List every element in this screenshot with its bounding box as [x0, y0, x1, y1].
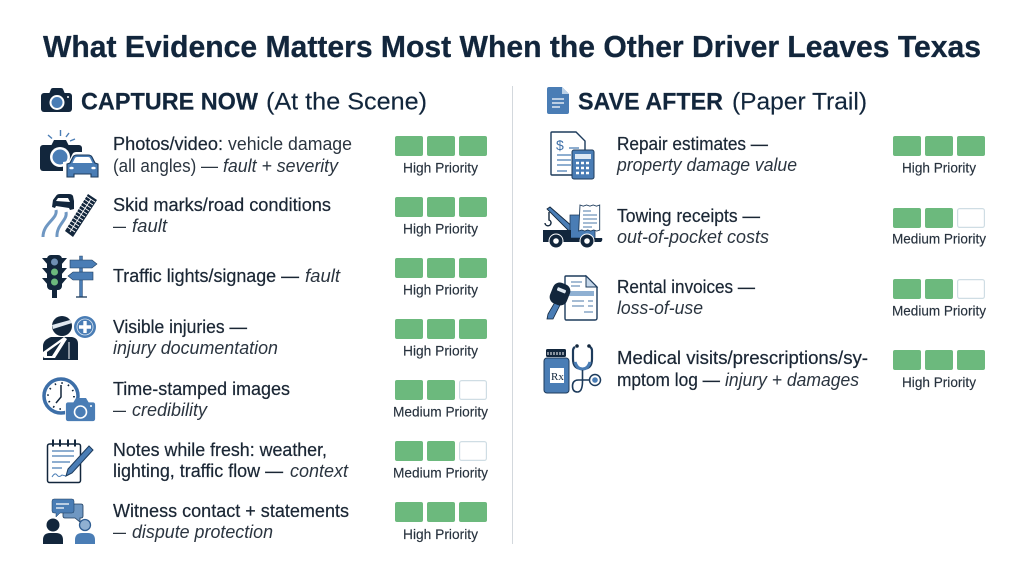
- icon: skid marks and tire tread: [43, 194, 97, 237]
- text: time-stamped images: [113, 379, 290, 420]
- icon: traffic light and signpost: [42, 255, 97, 298]
- text: medical visits: injury + damages: [725, 370, 859, 390]
- priority: medium: [393, 380, 488, 420]
- icon: injured person with medical cross: [43, 316, 96, 360]
- text: skid marks: [113, 195, 331, 236]
- priority: high: High Priority: [403, 282, 478, 298]
- row: visible injuries: [43, 316, 487, 360]
- text: towing receipts: [617, 206, 769, 247]
- icon: invoice and calculator: [551, 132, 594, 179]
- text: photos and video: [113, 134, 352, 176]
- text: visible injuries: injury documentation: [113, 338, 278, 358]
- row: notes while fresh: [48, 440, 488, 482]
- icon: witnesses with speech bubbles: [43, 499, 95, 544]
- text: towing receipts: out-of-pocket costs: [617, 227, 769, 247]
- text: time-stamped images: credibility: [132, 400, 208, 420]
- icon: camera and car: [40, 130, 101, 179]
- text: photos and video: vehicle damage: [228, 134, 352, 154]
- heading: save after: (Paper Trail): [732, 88, 867, 116]
- icon: pill bottle and stethoscope: [544, 344, 600, 393]
- icon: clock and camera: [44, 379, 96, 422]
- text: photos and video: Photos/video:: [113, 134, 223, 154]
- heading: save after: SAVE AFTER: [578, 88, 723, 116]
- priority: high: [395, 319, 487, 358]
- text: witness contact: Witness contact + statements: [113, 501, 349, 521]
- text: photos and video: fault + severity: [223, 156, 339, 176]
- icon: notepad and pen: [48, 440, 93, 482]
- priority: high: [893, 350, 985, 390]
- priority: medium: Medium Priority: [892, 302, 986, 318]
- priority: high: High Priority: [902, 160, 976, 176]
- icon: car key and rental invoice: [547, 276, 597, 320]
- text: skid marks: —: [113, 216, 126, 236]
- priority: medium: [892, 208, 986, 246]
- priority: high: [395, 258, 487, 298]
- priority: high: [395, 136, 487, 176]
- title: What Evidence Matters Most When the Other Driver Leaves Texas: [43, 29, 981, 64]
- row: medical visits: [544, 344, 985, 393]
- text: medical visits: mptom log —: [617, 370, 720, 390]
- text: notes while fresh: context: [290, 461, 349, 481]
- priority: high: High Priority: [403, 160, 478, 176]
- text: traffic lights: Traffic lights/signage —: [113, 266, 299, 286]
- priority: medium: [393, 441, 488, 480]
- text: time-stamped images: Time-stamped images: [113, 379, 290, 399]
- priority: medium: Medium Priority: [892, 230, 986, 246]
- row: time-stamped images: [44, 379, 488, 422]
- icon: tow truck and receipt: [543, 205, 602, 248]
- heading: save after: [547, 87, 867, 116]
- priority: high: [395, 502, 487, 542]
- text: repair estimates: Repair estimates —: [617, 134, 768, 154]
- text: witness contact: [113, 501, 349, 542]
- text: repair estimates: [616, 134, 797, 175]
- icon: pill bottle and stethoscope: Rx: [551, 371, 564, 383]
- priority: high: [893, 136, 985, 176]
- heading: capture now: [41, 88, 427, 116]
- text: witness contact: dispute protection: [132, 522, 273, 542]
- priority: medium: [892, 279, 986, 318]
- text: towing receipts: Towing receipts —: [617, 206, 760, 226]
- row: towing receipts: [543, 205, 986, 248]
- text: rental invoices: Rental invoices —: [617, 277, 755, 297]
- text: notes while fresh: [113, 440, 349, 481]
- row: skid marks: [43, 194, 487, 237]
- text: notes while fresh: Notes while fresh: weather,: [113, 440, 327, 460]
- row: photos and video: [40, 130, 487, 179]
- text: repair estimates: property damage value: [616, 155, 797, 175]
- priority: high: High Priority: [403, 342, 478, 358]
- text: notes while fresh: lighting, traffic flow —: [113, 461, 283, 481]
- heading: capture now: CAPTURE NOW: [81, 88, 259, 116]
- priority: high: [395, 197, 487, 236]
- row: traffic lights: [42, 255, 487, 298]
- text: medical visits: Medical visits/prescriptions/sy-: [617, 348, 868, 368]
- icon: invoice and calculator: $: [556, 137, 564, 153]
- panel: save after: [543, 87, 986, 393]
- text: skid marks: fault: [132, 216, 168, 236]
- priority: high: High Priority: [403, 526, 478, 542]
- panel: capture now: [40, 88, 488, 544]
- text: medical visits: [617, 348, 868, 390]
- row: witness contact: [43, 499, 487, 544]
- text: traffic lights: fault: [305, 266, 341, 286]
- priority: medium: Medium Priority: [393, 464, 488, 480]
- priority: medium: Medium Priority: [393, 404, 488, 420]
- text: rental invoices: loss-of-use: [617, 298, 703, 318]
- text: rental invoices: [617, 277, 755, 318]
- text: witness contact: —: [113, 522, 126, 542]
- row: rental invoices: [547, 276, 986, 320]
- priority: high: High Priority: [403, 220, 478, 236]
- text: photos and video: (all angles) —: [113, 156, 218, 176]
- text: time-stamped images: —: [113, 400, 126, 420]
- priority: high: High Priority: [902, 374, 976, 390]
- text: visible injuries: [113, 317, 278, 358]
- text: visible injuries: Visible injuries —: [113, 317, 247, 337]
- text: skid marks: Skid marks/road conditions: [113, 195, 331, 215]
- row: repair estimates: [551, 132, 985, 179]
- heading: capture now: (At the Scene): [266, 88, 427, 116]
